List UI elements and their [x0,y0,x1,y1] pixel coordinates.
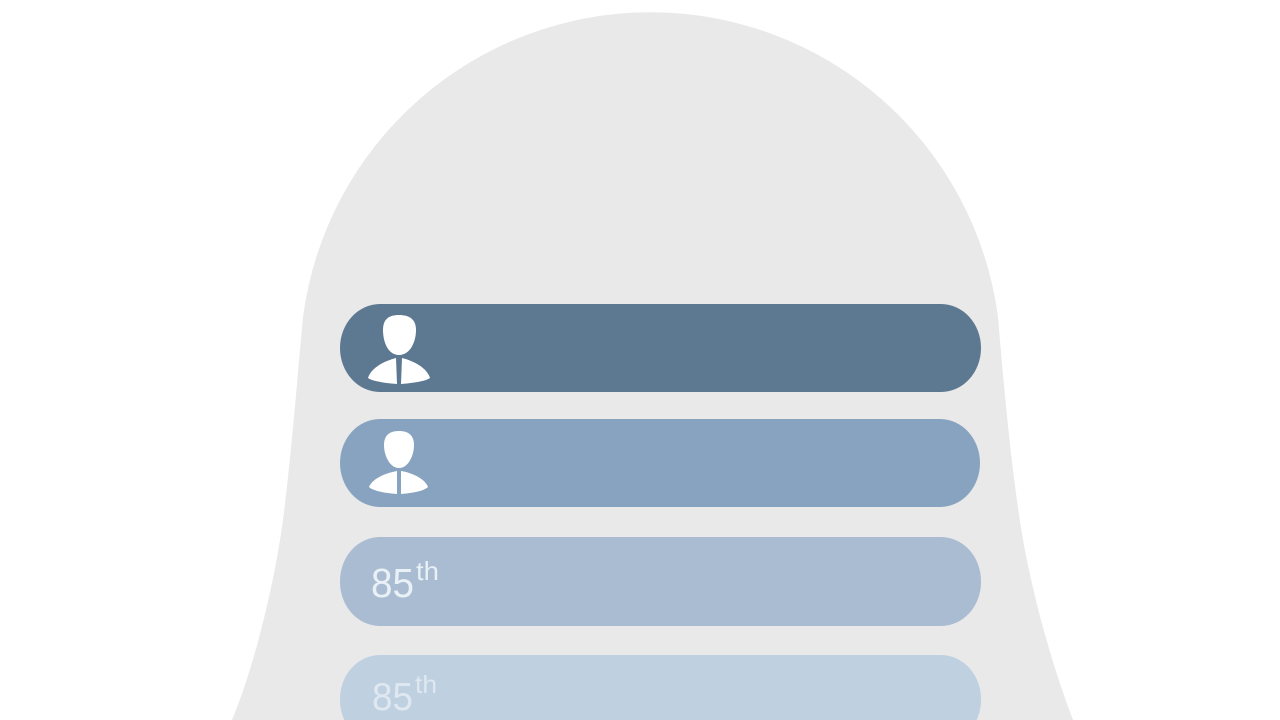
bar 1: dark blue with person icon [340,304,981,392]
icon: person with tie, mid bar [369,431,428,494]
icon: person with tie, dark bar [368,315,430,384]
label: 85: 85 [371,560,414,606]
bar 3: light blue with 85th label [340,537,981,626]
label: 85, faded: 85 [372,676,413,719]
bar 2: mid blue with person icon [340,419,980,507]
bell-shaped background [232,12,1073,720]
label: th superscript, faded: th [415,671,437,699]
label: th superscript: th [416,556,439,586]
bar 4: palest blue with 85th label, cropped [340,655,981,720]
